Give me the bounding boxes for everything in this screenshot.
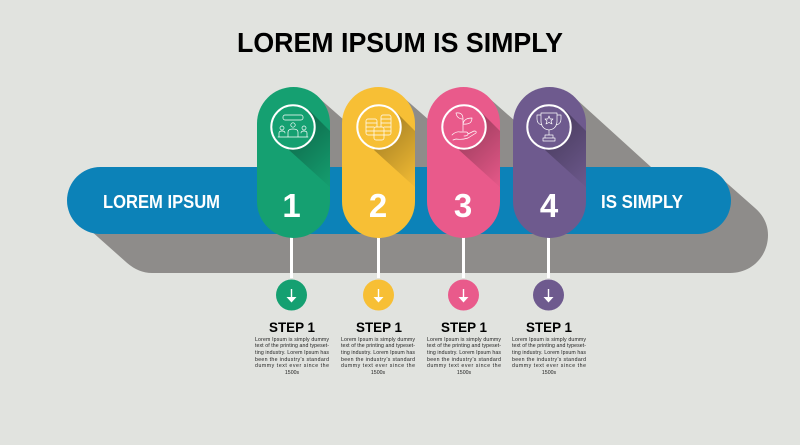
step text 4: dummy text ever since the xyxy=(512,363,586,369)
arrow badge 1 xyxy=(276,280,307,310)
icon: plant in hand xyxy=(452,113,476,140)
step text 3: ting industry. Lorem Ipsum has xyxy=(427,350,501,356)
step text 1: dummy text ever since the xyxy=(255,363,329,369)
step text 3: 1500s xyxy=(457,370,471,376)
step text 2: 1500s xyxy=(371,370,385,376)
step heading 3: STEP 1 xyxy=(441,319,487,335)
panel: step 1 pill xyxy=(257,87,332,238)
connector lines xyxy=(290,236,550,278)
step text 4: Lorem Ipsum is simply dummy xyxy=(512,337,586,343)
step text 1: 1500s xyxy=(285,370,299,376)
step text 2: ting industry. Lorem Ipsum has xyxy=(341,350,415,356)
step text 2: Lorem Ipsum is simply dummy xyxy=(341,337,415,343)
step text 4 xyxy=(512,337,586,376)
number 3: 3 xyxy=(454,187,472,224)
panel: step 4 details xyxy=(512,280,586,376)
step text 2: text of the printing and typeset- xyxy=(341,343,415,349)
panel: step 3 pill xyxy=(427,87,502,238)
arrow badge 2 xyxy=(363,280,394,310)
icon: trophy xyxy=(537,113,561,141)
number 4: 4 xyxy=(540,187,559,224)
step text 1: been the industry's standard xyxy=(255,357,329,363)
panel: step 1 details xyxy=(255,280,329,376)
title: LOREM IPSUM IS SIMPLY xyxy=(237,27,563,58)
step text 3: text of the printing and typeset- xyxy=(427,343,501,349)
banner bar xyxy=(67,167,731,234)
step text 2: dummy text ever since the xyxy=(341,363,415,369)
step heading 1: STEP 1 xyxy=(269,319,315,335)
number 2: 2 xyxy=(369,187,387,224)
step text 4: text of the printing and typeset- xyxy=(512,343,586,349)
step text 4: been the industry's standard xyxy=(512,357,586,363)
banner label right: IS SIMPLY xyxy=(601,192,683,212)
banner label left: LOREM IPSUM xyxy=(103,192,220,212)
step text 3: dummy text ever since the xyxy=(427,363,501,369)
panel: step 4 pill xyxy=(513,87,588,238)
step text 4: 1500s xyxy=(542,370,556,376)
step text 3: been the industry's standard xyxy=(427,357,501,363)
step text 1: ting industry. Lorem Ipsum has xyxy=(255,350,329,356)
panel: step 2 pill xyxy=(342,87,417,238)
step text 3 xyxy=(427,337,501,376)
panel: step 3 details xyxy=(427,280,501,376)
arrow badge 3 xyxy=(448,280,479,310)
long drop shadow xyxy=(90,98,768,273)
step text 1: text of the printing and typeset- xyxy=(255,343,329,349)
icon: coins xyxy=(366,115,391,140)
arrow badge 4 xyxy=(533,280,564,310)
icon: meeting xyxy=(278,115,308,137)
panel: step 2 details xyxy=(341,280,415,376)
number 1: 1 xyxy=(282,187,301,224)
step text 2: been the industry's standard xyxy=(341,357,415,363)
step text 1: Lorem Ipsum is simply dummy xyxy=(255,337,329,343)
step text 3: Lorem Ipsum is simply dummy xyxy=(427,337,501,343)
step heading 4: STEP 1 xyxy=(526,319,572,335)
step text 4: ting industry. Lorem Ipsum has xyxy=(512,350,586,356)
step text 2 xyxy=(341,337,415,376)
step text 1 xyxy=(255,337,329,376)
step heading 2: STEP 1 xyxy=(356,319,402,335)
